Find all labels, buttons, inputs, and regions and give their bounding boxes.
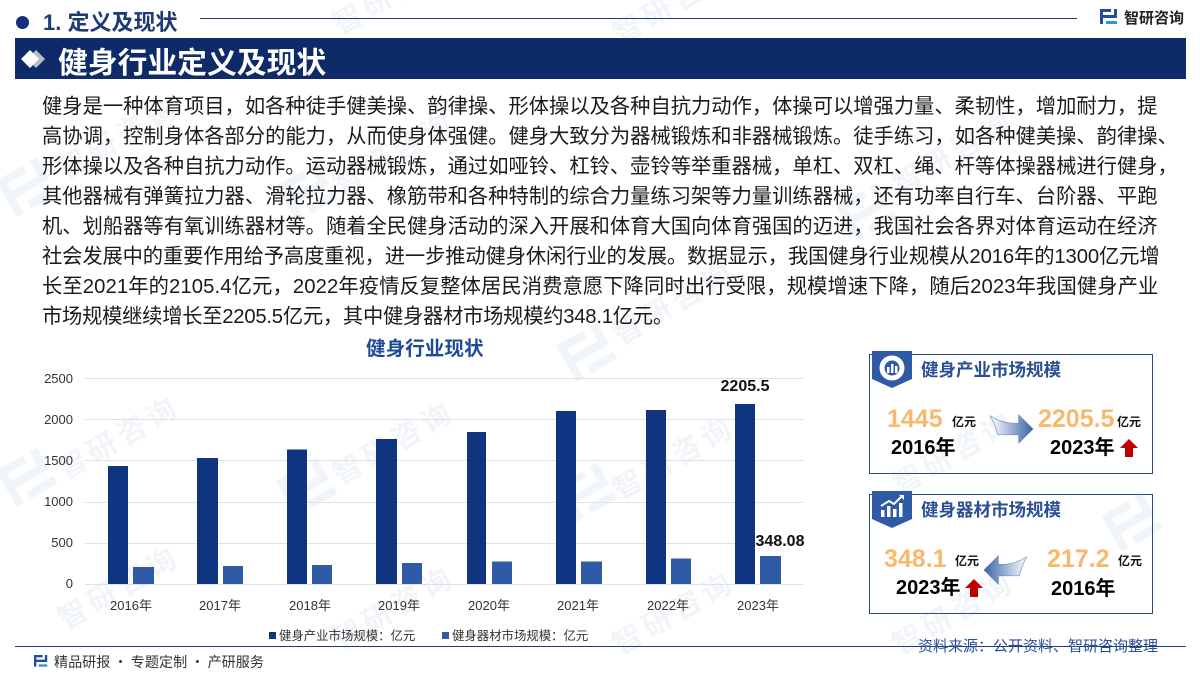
x axis labels: 2018年: [289, 598, 331, 613]
icon: red up arrow: [1120, 439, 1138, 457]
value 2023: 348.1: [884, 545, 947, 573]
body paragraph: 长至2021年的2105.4亿元，2022年疫情反复整体居民消费意愿下降同时出行受限，规模增速下降，随后2023年我国健身产业: [42, 276, 1158, 298]
value 2016: 217.2: [1047, 545, 1110, 573]
arrow left: [984, 555, 1027, 585]
body paragraph: [42, 95, 1178, 328]
panel border: [869, 354, 1153, 474]
title banner: [15, 38, 1186, 79]
legend: [269, 628, 588, 643]
value 2016: 1445: [887, 405, 943, 433]
panel heading: 健身器材市场规模: [921, 497, 1061, 522]
body paragraph: 健身是一种体育项目，如各种徒手健美操、韵律操、形体操以及各种自抗力动作，体操可以增强力量、柔韧性，增加耐力，提: [42, 96, 1157, 118]
source note: 资料来源：公开资料、智研咨询整理: [918, 635, 1158, 656]
watermark layer: 智研咨询: [604, 559, 742, 663]
watermark layer: 智研咨询: [884, 559, 1022, 663]
x axis labels: 2016年: [110, 598, 152, 613]
watermark layer: 智研咨询: [324, 99, 462, 203]
header rule: [200, 18, 1077, 19]
y axis labels: 2000: [44, 412, 73, 427]
x axis labels: 2022年: [647, 598, 689, 613]
value 2023: 2205.5: [1038, 405, 1114, 433]
watermark layer: 智研咨询: [604, 404, 742, 508]
bar chart: [44, 371, 805, 643]
y axis labels: 1000: [44, 494, 73, 509]
logo: 智研咨询: 智研咨询: [1124, 7, 1184, 28]
legend: 健身产业市场规模：亿元: [279, 628, 415, 643]
watermark layer: 智研咨询: [49, 84, 187, 188]
footer slogan: [34, 652, 264, 672]
unit: 亿元: [952, 413, 976, 430]
watermark layer: 智研咨询: [49, 384, 187, 488]
body paragraph: 社会发展中的重要作用给予高度重视，进一步推动健身休闲行业的发展。数据显示，我国健身行业规模从2016年的1300亿元增: [42, 246, 1160, 268]
icon: double diamonds: [21, 50, 45, 68]
watermark layer: 智研咨询: [324, 554, 462, 658]
y axis labels: 0: [66, 576, 73, 591]
watermark layer: 智研咨询: [49, 534, 187, 638]
body paragraph: 市场规模继续增长至2205.5亿元，其中健身器材市场规模约348.1亿元。: [42, 306, 673, 328]
year 2023: 2023年: [1050, 437, 1114, 459]
panel heading: 健身产业市场规模: [921, 357, 1061, 382]
body paragraph: 其他器械有弹簧拉力器、滑轮拉力器、橡筋带和各种特制的综合力量练习架等力量训练器械，还有功率自行车、台阶器、平跑: [42, 186, 1157, 208]
x axis labels: [110, 598, 779, 613]
year 2023: 2023年: [896, 577, 960, 599]
unit: 亿元: [1118, 552, 1142, 569]
body paragraph: 机、划船器等有氧训练器材等。随着全民健身活动的深入开展和体育大国向体育强国的迈进，我国社会各界对体育运动在经济: [42, 216, 1157, 238]
watermark layer: 智研咨询: [604, 249, 742, 353]
year 2016: 2016年: [1051, 578, 1116, 600]
y axis labels: 500: [51, 535, 73, 550]
x axis labels: 2017年: [199, 598, 241, 613]
y axis labels: 2500: [44, 371, 73, 386]
icon: donut badge: [872, 351, 912, 388]
x axis labels: 2019年: [378, 598, 420, 613]
x axis labels: 2020年: [468, 598, 510, 613]
watermark layer: 智研咨询: [324, 389, 462, 493]
unit: 亿元: [955, 552, 979, 569]
panel: 健身产业市场规模: [869, 351, 1153, 474]
icon: red up arrow: [965, 579, 983, 597]
data labels: 348.08: [756, 533, 805, 550]
x axis labels: 2021年: [557, 598, 599, 613]
y axis labels: 1500: [44, 453, 73, 468]
unit: 亿元: [1117, 413, 1141, 430]
icon: logo small: [34, 655, 48, 667]
panel: 健身器材市场规模: [869, 491, 1153, 614]
slogan text: 精品研报 · 专题定制 · 产研服务: [54, 652, 264, 672]
icon: growth chart badge: [872, 491, 912, 528]
body paragraph: 高协调，控制身体各部分的能力，从而使身体强健。健身大致分为器械锻炼和非器械锻炼。徒手练习，如各种健美操、韵律操、: [42, 126, 1178, 148]
chart title: 健身行业现状: [366, 332, 484, 361]
y axis labels: [44, 371, 73, 591]
data labels: [721, 378, 805, 550]
arrow right: [990, 414, 1034, 444]
watermark layer: 智研咨询: [884, 399, 1022, 503]
footer rule: [15, 646, 1186, 647]
data labels: 2205.5: [721, 378, 770, 395]
body paragraph: 形体操以及各种自抗力动作。运动器械锻炼，通过如哑铃、杠铃、壶铃等举重器械，单杠、双杠、绳、杆等体操器械进行健身，: [42, 156, 1178, 178]
legend: 健身器材市场规模：亿元: [452, 628, 588, 643]
section heading: 1. 定义及现状: [43, 10, 177, 35]
year 2016: 2016年: [891, 437, 956, 459]
watermark layer: 智研咨询: [884, 99, 1022, 203]
panel border: [869, 494, 1153, 614]
series: 健身器材市场规模: [133, 556, 781, 584]
title text: 健身行业定义及现状: [58, 38, 326, 82]
x axis labels: 2023年: [737, 598, 779, 613]
series: 健身产业市场规模: [108, 404, 755, 584]
